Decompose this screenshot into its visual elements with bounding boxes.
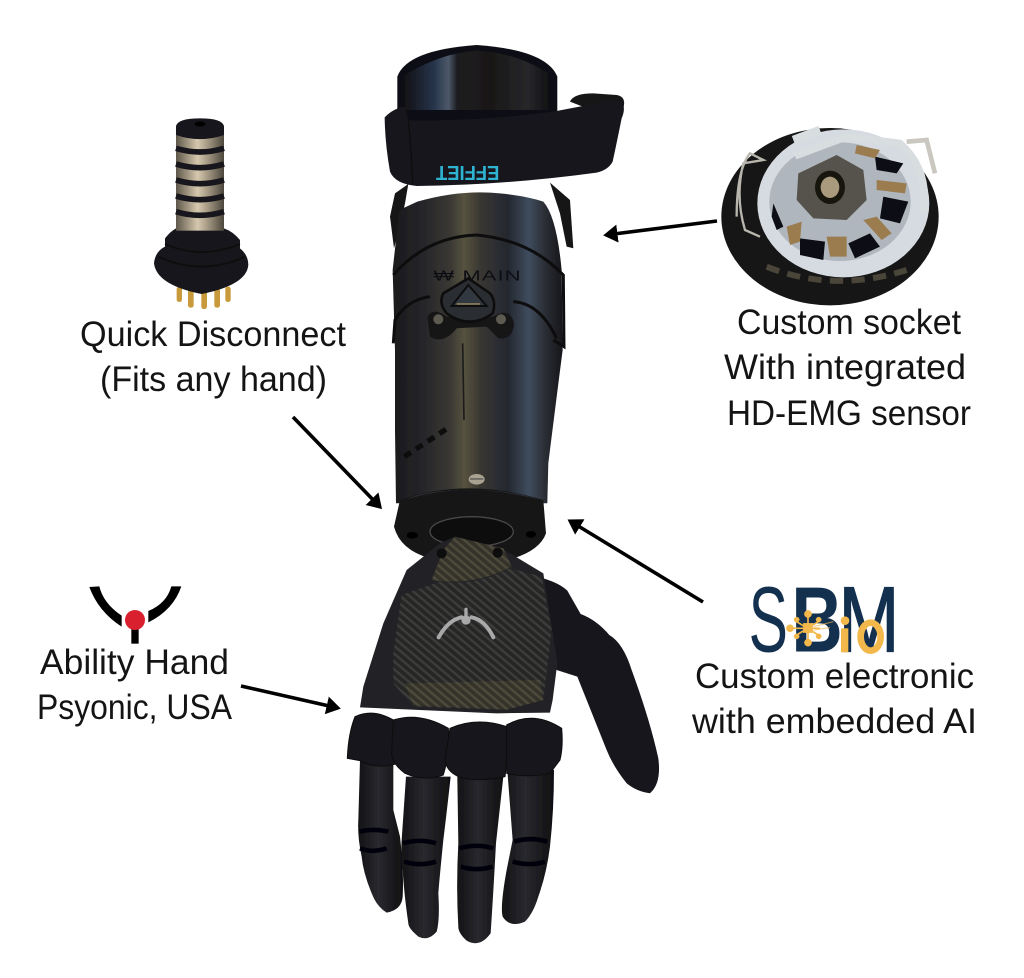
electrode panels bbox=[772, 157, 908, 260]
photo: Ability Hand bbox=[347, 537, 659, 943]
label: custom socket: HD-EMG sensor bbox=[727, 394, 971, 433]
centre hub bbox=[797, 155, 867, 220]
socket cup bbox=[397, 45, 557, 123]
logo letters: B bbox=[791, 568, 843, 672]
dark rings bbox=[176, 148, 224, 215]
column bbox=[176, 127, 224, 231]
finger 4 bbox=[502, 770, 554, 924]
side buckles bbox=[390, 183, 573, 248]
label: custom electronic bbox=[691, 657, 977, 741]
base bbox=[154, 228, 248, 294]
carbon fibre panel bbox=[393, 568, 552, 710]
logo gold io bbox=[841, 616, 881, 652]
pins bbox=[177, 287, 231, 309]
image: quick disconnect connector bbox=[154, 118, 248, 309]
logo: Psyonic bbox=[89, 586, 181, 644]
palm shell bbox=[360, 537, 557, 713]
vertical scratch and dashes bbox=[399, 343, 464, 460]
label: custom socket bbox=[724, 303, 971, 433]
lacing ridges bbox=[393, 235, 564, 347]
wrist carbon cap bbox=[432, 537, 512, 582]
finger 2 bbox=[401, 777, 451, 938]
label: custom electronic: with embedded AI bbox=[691, 702, 977, 741]
label: quick disconnect: (Fits any hand) bbox=[100, 360, 327, 399]
image: socket interior with HD-EMG sensor bbox=[721, 128, 939, 305]
label: ability hand bbox=[37, 643, 233, 727]
label: ability hand: Psyonic, USA bbox=[37, 688, 233, 727]
silicone strip bbox=[795, 137, 925, 213]
finger 3 bbox=[457, 777, 503, 943]
label: quick disconnect: Quick Disconnect bbox=[80, 315, 346, 354]
forearm socket shell bbox=[393, 192, 563, 503]
top cap bbox=[176, 118, 224, 139]
strap logo text: EFFIET bbox=[436, 161, 499, 184]
logo letters: S bbox=[749, 568, 788, 672]
arrow: ability hand label to hand bbox=[241, 686, 338, 708]
label: custom electronic: Custom electronic bbox=[695, 657, 974, 696]
tightening dial bbox=[427, 278, 514, 339]
photo: wrist coupling disc bbox=[394, 488, 546, 558]
fabric knuckles bbox=[347, 713, 562, 780]
hand logo bbox=[439, 609, 493, 637]
photo: socket forearm and strap bbox=[385, 45, 624, 503]
thumb bbox=[543, 578, 659, 793]
label: ability hand: Ability Hand bbox=[40, 643, 229, 682]
engraved brand: ₩ MAIN bbox=[433, 269, 522, 285]
logo: SBMio bbox=[749, 568, 899, 672]
label: custom socket: Custom socket bbox=[737, 303, 961, 342]
strap bbox=[385, 93, 624, 186]
finger 1 bbox=[358, 760, 403, 913]
label: quick disconnect bbox=[80, 315, 346, 399]
label: custom socket: With integrated bbox=[724, 348, 966, 387]
arrow: socket label to socket bbox=[606, 221, 717, 235]
arrow: quick disconnect to wrist bbox=[293, 417, 380, 507]
screw bbox=[469, 474, 485, 485]
logo letters: M bbox=[839, 568, 899, 672]
logo circuit icon bbox=[786, 610, 833, 646]
arrow: electronics to wrist bbox=[570, 521, 703, 602]
lower gold carbon band bbox=[405, 680, 543, 709]
logo letters bbox=[749, 568, 899, 672]
